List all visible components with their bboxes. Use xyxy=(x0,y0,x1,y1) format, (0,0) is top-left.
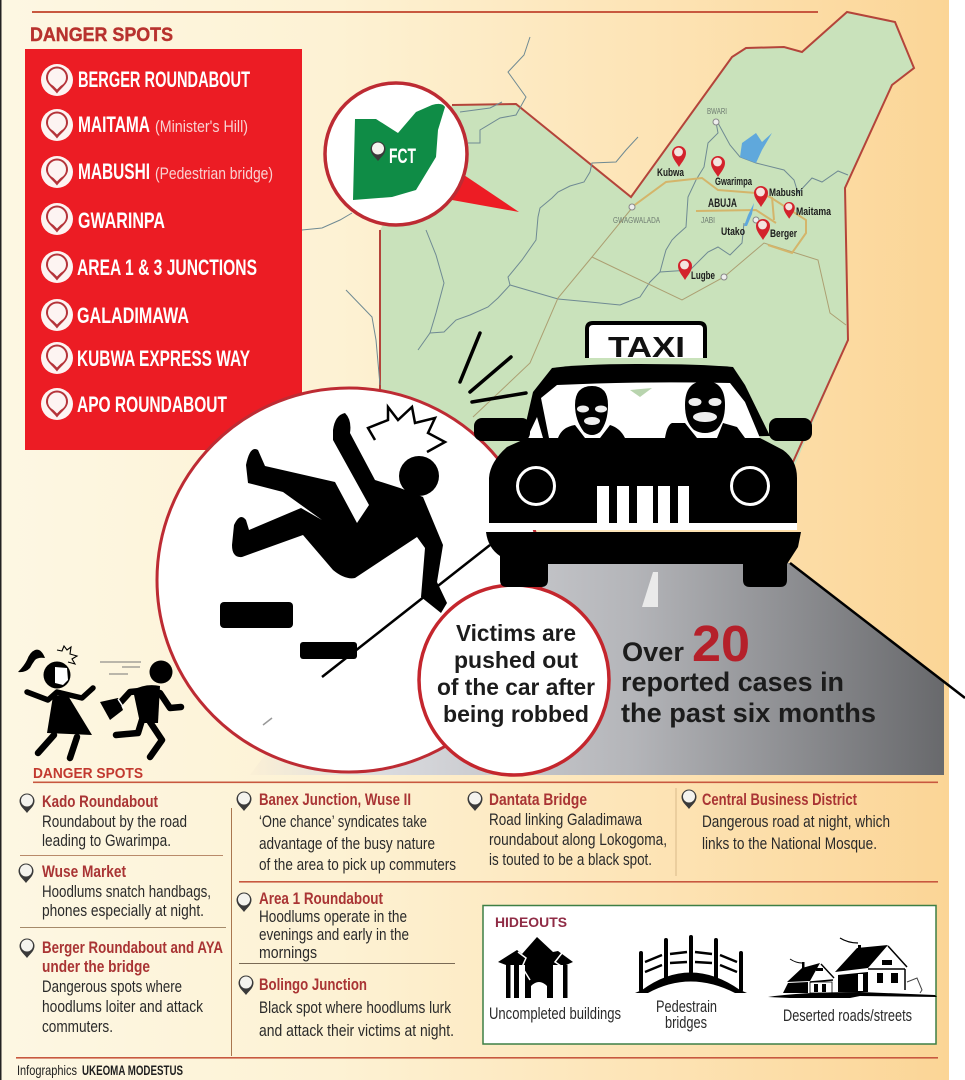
column: fourth danger spot xyxy=(682,790,890,853)
map towns and pins: GWAGWALADA xyxy=(613,215,660,225)
icon: woman and snatcher running xyxy=(18,646,181,758)
column: second danger spots: advantage of the busy nature xyxy=(259,835,435,853)
impact lines xyxy=(460,333,526,402)
taxi sign: TAXI xyxy=(608,332,685,364)
column: second danger spots: Banex Junction, Wuse II xyxy=(259,790,411,809)
icon: deserted houses xyxy=(768,938,937,998)
map towns and pins: BWARI xyxy=(707,106,727,116)
map towns and pins: Berger xyxy=(770,228,798,240)
car roof and windscreen xyxy=(522,364,770,440)
panel: hideouts: Deserted roads/streets xyxy=(783,1007,912,1025)
panel: danger spots list: GALADIMAWA xyxy=(77,303,189,328)
panel: hideouts: Uncompleted buildings xyxy=(489,1005,621,1023)
credit: Infographics xyxy=(17,1062,77,1078)
section heading: danger spots: DANGER SPOTS xyxy=(33,765,143,782)
column: first danger spots: Kado Roundabout xyxy=(42,792,158,811)
illustration: victim falling xyxy=(157,388,541,772)
panel: danger spots list: APO ROUNDABOUT xyxy=(77,392,227,417)
column: second danger spots: Black spot where hoodlums lurk xyxy=(259,999,452,1017)
taxi sign xyxy=(587,323,705,364)
callout: victims pushed out: of the car after xyxy=(437,674,595,700)
column: fourth danger spot: Dangerous road at night, which xyxy=(702,813,890,831)
panel: danger spots list: (Minister's Hill) xyxy=(155,117,248,136)
panel: danger spots list: KUBWA EXPRESS WAY xyxy=(77,346,250,371)
credit: UKEOMA MODESTUS xyxy=(82,1062,183,1078)
panel: hideouts xyxy=(483,906,937,1044)
column: third danger spot: roundabout along Lokogoma, xyxy=(489,831,667,849)
map of the FCT xyxy=(302,12,914,470)
column: first danger spots xyxy=(18,792,226,1036)
grille xyxy=(597,486,689,526)
column: second danger spots: evenings and early in the xyxy=(259,926,409,944)
robber left xyxy=(558,386,625,438)
column: fourth danger spot: Central Business District xyxy=(702,790,857,809)
panel: hideouts: bridges xyxy=(665,1014,707,1032)
callout: victims pushed out xyxy=(419,585,609,775)
panel: danger spots list xyxy=(25,49,302,450)
column: first danger spots: hoodlums loiter and attack xyxy=(42,998,204,1016)
FCT locator inset: FCT xyxy=(389,145,416,168)
column: first danger spots: leading to Gwarimpa. xyxy=(42,832,171,850)
map towns and pins: Kubwa xyxy=(657,167,685,179)
callout: victims pushed out: Victims are xyxy=(456,620,576,646)
illustration: taxi with masked robbers xyxy=(474,323,812,587)
panel: danger spots list: MAITAMA xyxy=(78,112,150,137)
map towns and pins: Gwarimpa xyxy=(715,176,753,188)
lakes xyxy=(740,133,772,226)
statistic: reported cases: reported cases in xyxy=(621,667,844,697)
column: third danger spot xyxy=(468,790,667,869)
panel: danger spots list: (Pedestrian bridge) xyxy=(155,164,273,183)
wing mirrors xyxy=(474,418,530,441)
column: first danger spots: under the bridge xyxy=(42,957,150,976)
heading: danger spots: DANGER SPOTS xyxy=(30,25,173,46)
statistic: reported cases xyxy=(621,615,876,728)
column: fourth danger spot: links to the National Mosque. xyxy=(702,835,877,853)
column: second danger spots: ‘One chance’ syndicates take xyxy=(259,813,427,831)
column: second danger spots: of the area to pick up commuters xyxy=(259,856,456,874)
icon: pedestrian bridge xyxy=(635,937,747,993)
map towns and pins: Utako xyxy=(721,226,745,238)
map towns and pins: ABUJA xyxy=(708,196,737,210)
column: second danger spots xyxy=(236,790,456,1040)
robber right xyxy=(665,381,745,438)
panel: danger spots list: GWARINPA xyxy=(78,208,165,233)
panel: danger spots list: MABUSHI xyxy=(78,159,150,184)
road xyxy=(250,545,965,775)
callout: victims pushed out: being robbed xyxy=(443,701,589,727)
panel: hideouts: HIDEOUTS xyxy=(495,914,567,930)
map towns and pins: Lugbe xyxy=(691,270,715,282)
headlights xyxy=(518,468,554,504)
map towns and pins: JABI xyxy=(701,215,715,225)
column: second danger spots: Area 1 Roundabout xyxy=(259,889,383,908)
column: first danger spots: Dangerous spots where xyxy=(42,978,182,996)
column: first danger spots: Wuse Market xyxy=(42,862,126,881)
column: first danger spots: Hoodlums snatch handbags, xyxy=(42,883,211,901)
panel: danger spots list: AREA 1 & 3 JUNCTIONS xyxy=(77,255,257,280)
column: second danger spots: and attack their victims at night. xyxy=(259,1022,454,1040)
map towns and pins: Maitama xyxy=(796,206,832,218)
column: second danger spots: Bolingo Junction xyxy=(259,975,367,994)
panel: hideouts: Pedestrain xyxy=(656,998,717,1016)
column: second danger spots: mornings xyxy=(259,944,317,962)
credit xyxy=(17,1062,183,1078)
callout: victims pushed out: pushed out xyxy=(454,647,578,673)
column: first danger spots: Roundabout by the road xyxy=(42,813,187,831)
statistic: reported cases: the past six months xyxy=(621,698,876,728)
FCT locator inset xyxy=(325,83,519,225)
map towns and pins: Mabushi xyxy=(769,187,803,199)
statistic: reported cases: 20 xyxy=(692,615,750,672)
icon: uncompleted building xyxy=(498,937,573,998)
panel: danger spots list: BERGER ROUNDABOUT xyxy=(78,67,250,92)
car body xyxy=(489,438,797,523)
map towns and pins xyxy=(613,106,832,282)
column: first danger spots: commuters. xyxy=(42,1018,113,1036)
column: first danger spots: phones especially at night. xyxy=(42,902,204,920)
column: third danger spot: is touted to be a black spot. xyxy=(489,851,652,869)
column: third danger spot: Dantata Bridge xyxy=(489,790,587,809)
statistic: reported cases: Over xyxy=(622,637,684,667)
column: third danger spot: Road linking Galadimawa xyxy=(489,811,643,829)
column: first danger spots: Berger Roundabout and AYA xyxy=(42,938,223,957)
column: second danger spots: Hoodlums operate in the xyxy=(259,908,407,926)
icon: impact burst xyxy=(368,407,445,452)
